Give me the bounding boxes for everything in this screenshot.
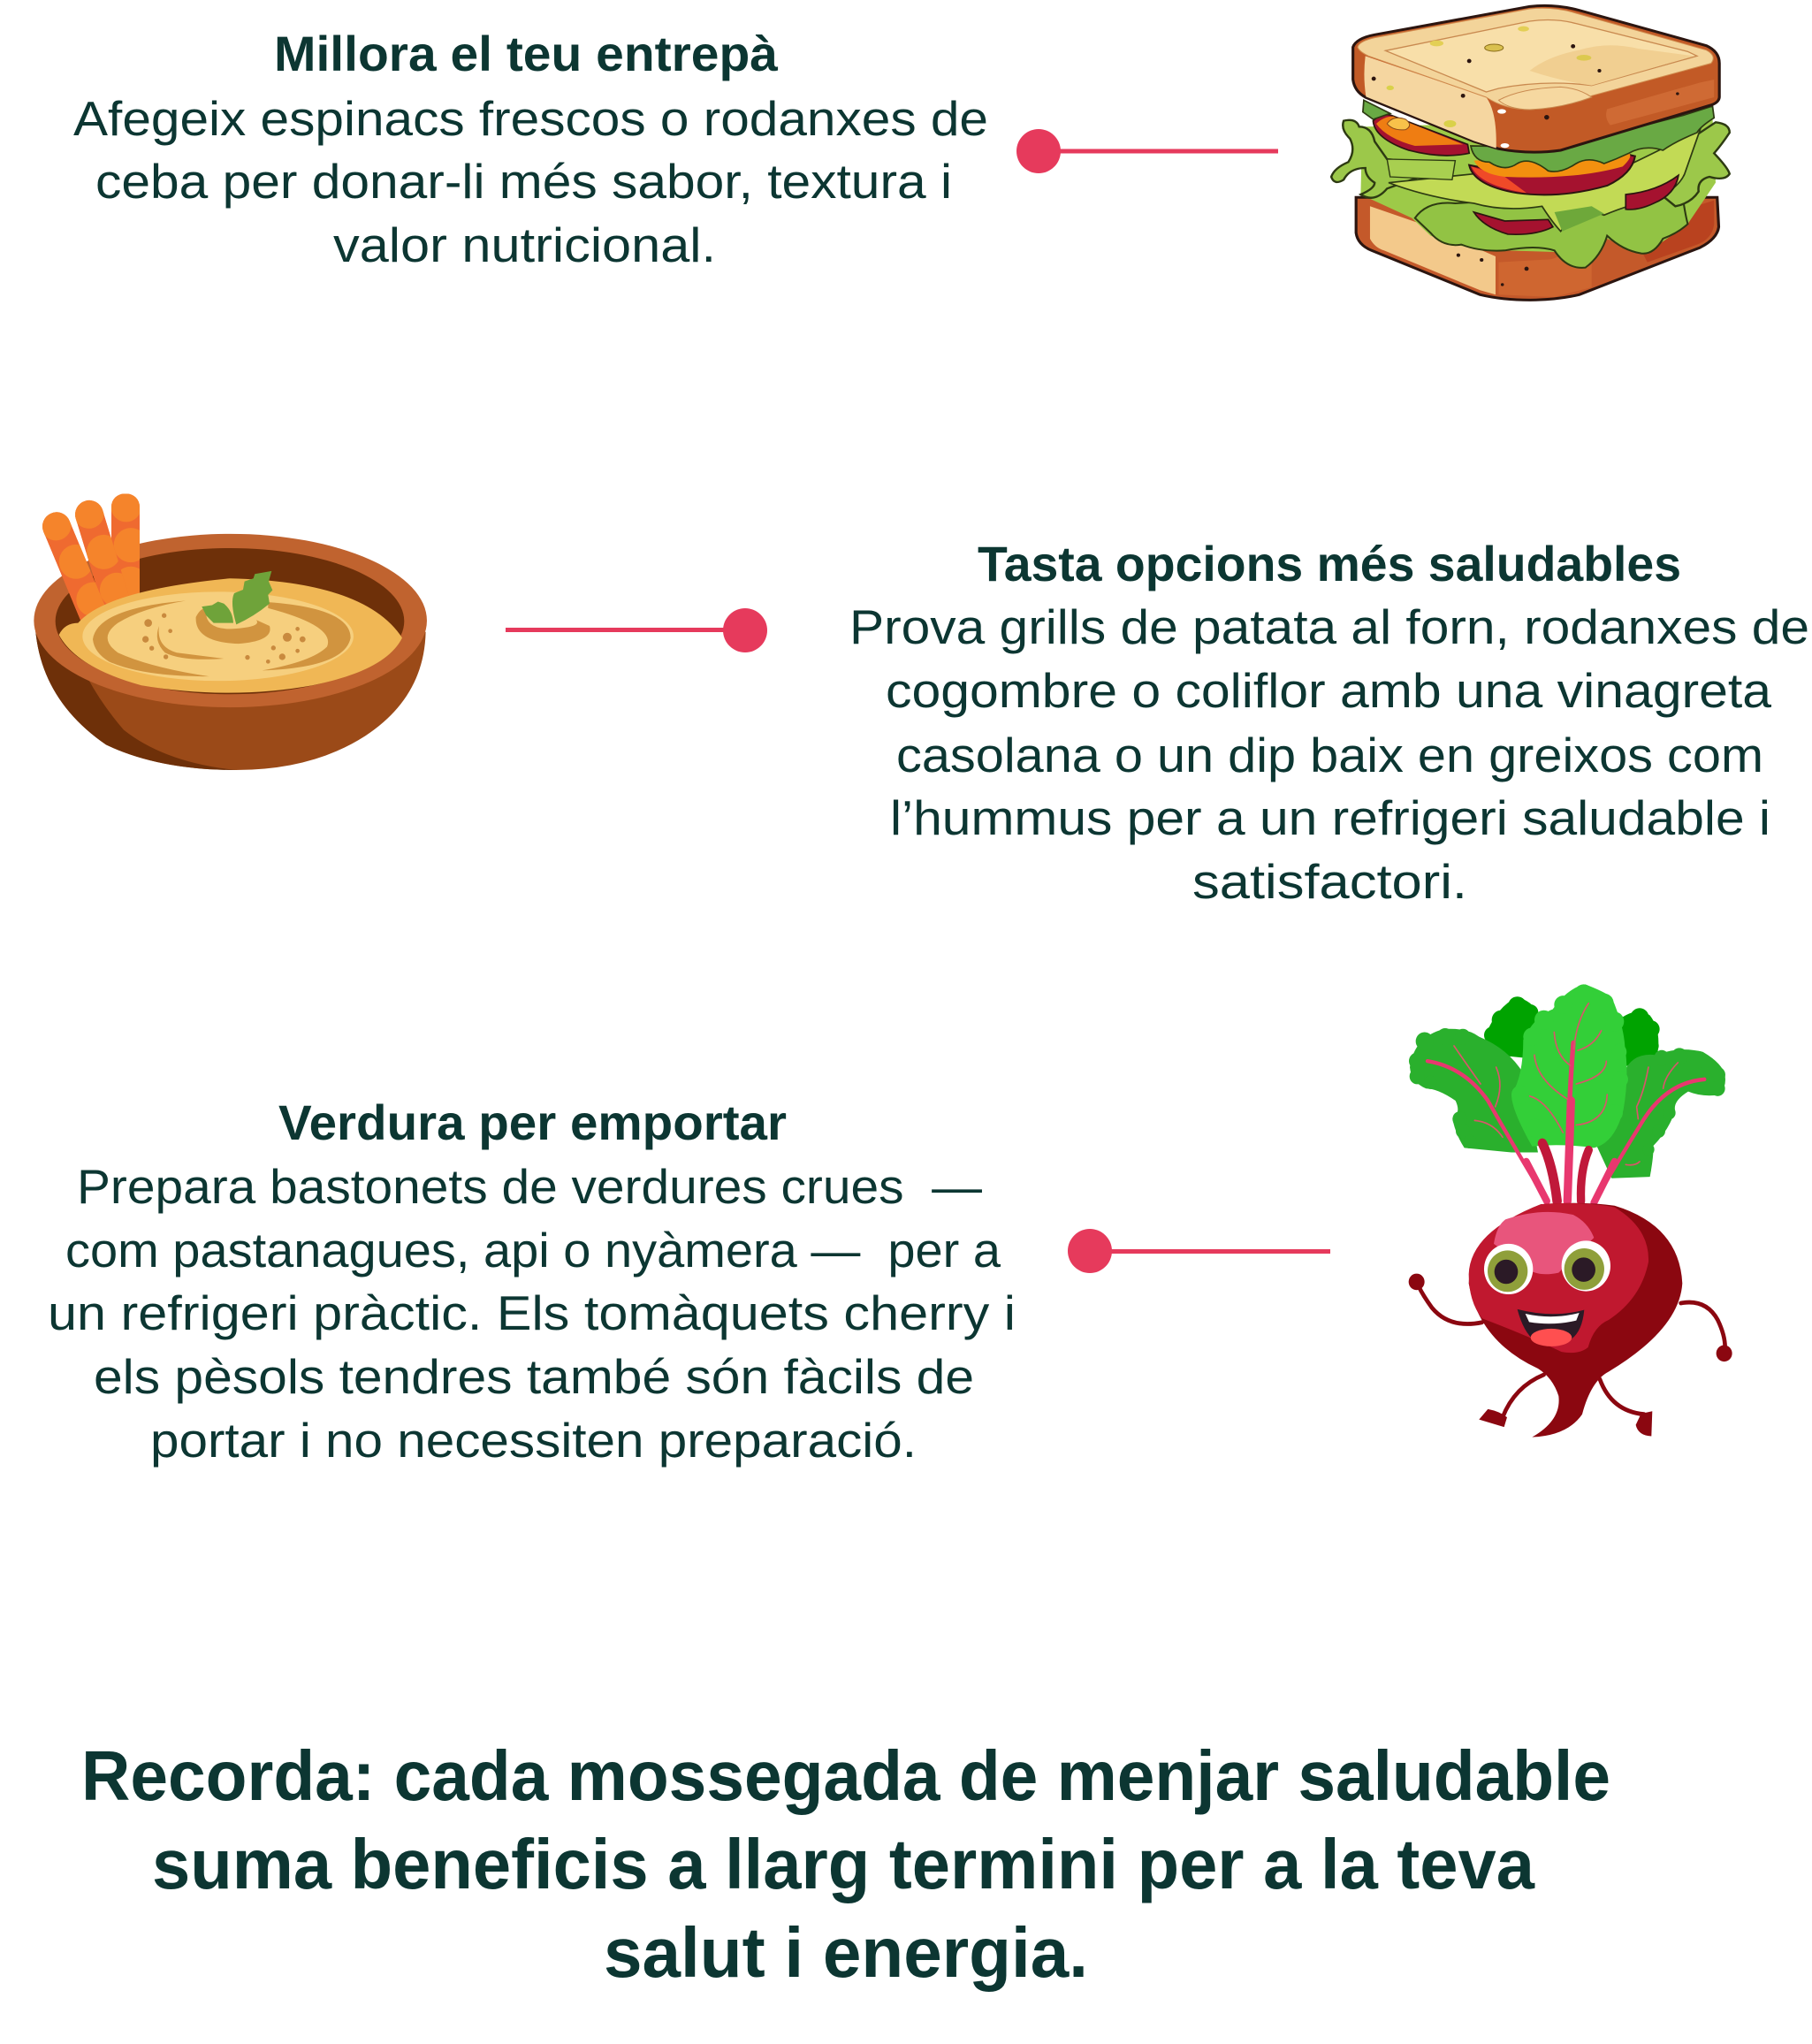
- body text: raw vegetable sticks: Prepara bastonets de verdures crues —: [77, 1159, 982, 1214]
- body text: healthier options: satisfactori.: [1192, 854, 1467, 909]
- lettuce middle layer: [1389, 130, 1700, 232]
- bowl body: [34, 534, 427, 770]
- body text: sandwich tip: Afegeix espinacs frescos o rodanxes de: [73, 91, 988, 146]
- hummus: [59, 578, 402, 693]
- beet mouth: [1518, 1309, 1584, 1346]
- tip block: sandwich text: [73, 26, 988, 272]
- top bread: [1353, 5, 1719, 152]
- icon: hummus bowl with carrot sticks: [34, 491, 427, 770]
- body text: healthier options: casolana o un dip baix en greixos com: [896, 728, 1763, 782]
- herb leaf: [202, 571, 272, 624]
- icon: sandwich: [1331, 5, 1730, 300]
- lettuce base mass: [1360, 118, 1716, 268]
- closing message: Recorda: cada mossegada de menjar saludable: [81, 1736, 1610, 1815]
- lettuce lower layer: [1415, 188, 1687, 268]
- body text: raw vegetable sticks: com pastanagues, api o nyàmera — per a: [65, 1223, 1001, 1278]
- body text: healthier options: [849, 599, 1809, 909]
- body text: sandwich tip: valor nutricional.: [333, 217, 716, 272]
- beet body: [1469, 1203, 1682, 1438]
- heading: Millora el teu entrepà: Millora el teu entrepà: [274, 26, 779, 81]
- body text: healthier options: Prova grills de patata al forn, rodanxes de: [849, 599, 1809, 654]
- closing message: [81, 1736, 1610, 1992]
- carrot sticks: [42, 493, 140, 621]
- closing message: suma beneficis a llarg termini per a la teva: [152, 1825, 1534, 1903]
- body text: sandwich tip: [73, 91, 988, 272]
- tip block: takeaway vegetables text: [48, 1094, 1016, 1468]
- closing message: salut i energia.: [604, 1913, 1088, 1992]
- upper dark lettuce: [1471, 106, 1714, 172]
- connector: sandwich: [1016, 129, 1278, 173]
- body text: healthier options: cogombre o coliflor amb una vinagreta: [886, 663, 1771, 718]
- connector: hummus: [506, 608, 767, 652]
- lettuce side frills: [1331, 120, 1452, 198]
- tomato slices: [1373, 115, 1679, 234]
- body text: raw vegetable sticks: portar i no necessiten preparació.: [150, 1413, 917, 1468]
- icon: running beet character: [1409, 984, 1732, 1438]
- body text: raw vegetable sticks: [48, 1159, 1016, 1468]
- body text: healthier options: l’hummus per a un refrigeri saludable i: [890, 790, 1770, 845]
- beet leaves: [1409, 984, 1725, 1178]
- bottom bread: [1356, 197, 1718, 300]
- beet eyes: [1484, 1240, 1610, 1294]
- body text: raw vegetable sticks: un refrigeri pràctic. Els tomàquets cherry i: [48, 1285, 1016, 1340]
- beet stems and veins: [1428, 1003, 1704, 1202]
- connector: beet: [1068, 1229, 1330, 1273]
- beet hands and feet: [1409, 1274, 1732, 1437]
- body text: raw vegetable sticks: els pèsols tendres també són fàcils de: [94, 1349, 974, 1404]
- tip block: hummus text: [849, 536, 1809, 909]
- heading: Verdura per emportar: Verdura per emportar: [278, 1094, 787, 1150]
- body text: sandwich tip: ceba per donar-li més sabor, textura i: [95, 154, 952, 209]
- heading: Tasta opcions més saludables: Tasta opcions més saludables: [978, 536, 1681, 591]
- beet limbs: [1419, 1286, 1725, 1417]
